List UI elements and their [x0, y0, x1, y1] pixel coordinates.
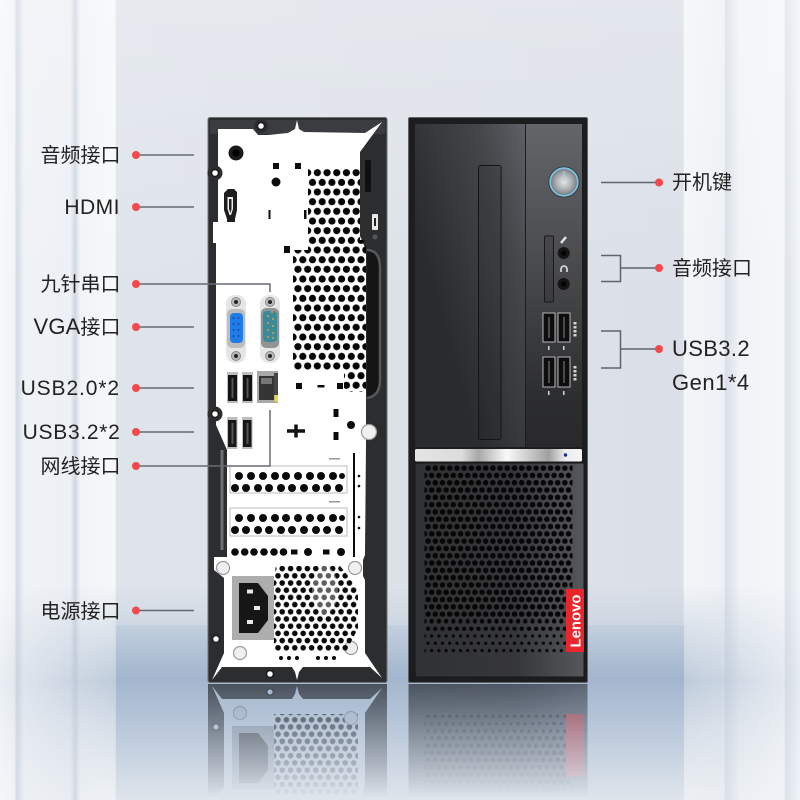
right labels: USB3.2: [672, 336, 750, 361]
front view of computer: [408, 118, 588, 682]
VGA port: [226, 295, 246, 363]
left labels: VGA接口: [34, 314, 120, 339]
left labels: 电源接口: [40, 600, 120, 623]
security slot: [365, 160, 378, 240]
callout lines right: [601, 182, 659, 368]
front audio jacks: [558, 237, 570, 290]
left drive panel: [415, 124, 525, 447]
left labels: 九针串口: [40, 273, 120, 296]
left labels: 网线接口: [40, 455, 120, 478]
network port: [257, 371, 278, 403]
left labels: HDMI: [64, 196, 120, 219]
right labels: 音频接口: [672, 257, 752, 280]
USB 2.0 ports: [227, 372, 253, 403]
left handle recess: [220, 450, 224, 550]
silver bar: [415, 449, 582, 462]
nine pin serial port: [260, 295, 280, 363]
left labels: 音频接口: [40, 144, 120, 167]
callout dots: [132, 151, 663, 614]
small plate marks: [268, 163, 355, 440]
honeycomb vent: [293, 168, 366, 392]
plus mark: [287, 424, 305, 438]
HDMI port: [224, 189, 237, 222]
audio jack: [228, 146, 244, 160]
Lenovo logo: Lenovo: [568, 594, 584, 648]
left labels: [21, 144, 120, 623]
optical drive door: [478, 166, 501, 440]
USB 3.2 ports: [227, 417, 252, 449]
front vent panel: [415, 463, 584, 677]
rear view of computer: [208, 118, 387, 682]
right handle recess: [367, 250, 380, 398]
right labels: [672, 171, 752, 395]
card reader slot: [544, 236, 554, 302]
front USB ports: [543, 313, 575, 395]
expansion slots: [230, 453, 360, 557]
right labels: 开机键: [672, 171, 732, 194]
screws on rear plate: [212, 122, 376, 678]
power supply vent: [274, 566, 358, 660]
power button: [548, 166, 580, 198]
callout lines left: [136, 155, 270, 610]
power socket: [232, 576, 274, 640]
left labels: USB3.2*2: [23, 421, 120, 444]
right labels: Gen1*4: [672, 370, 750, 395]
right control panel: [526, 124, 582, 447]
reflection of both computers on the floor: [208, 684, 588, 800]
left labels: USB2.0*2: [21, 377, 120, 400]
dark bumps around screws: [208, 119, 277, 681]
